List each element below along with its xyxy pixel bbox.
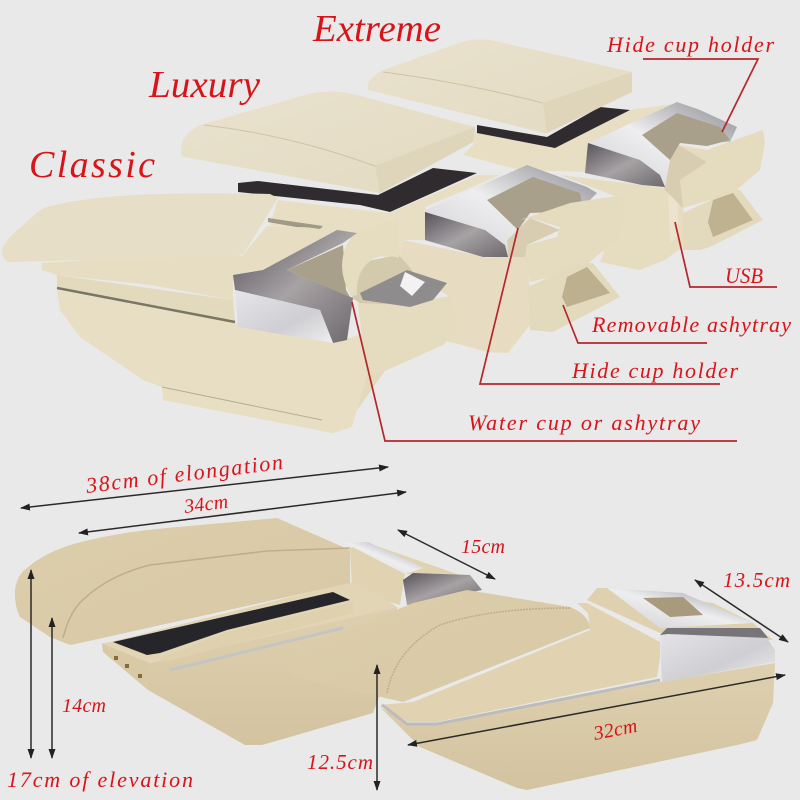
chrome rod [382, 680, 660, 724]
Classic chrome face [235, 290, 333, 343]
Classic foot [162, 340, 387, 433]
dimension label: 14cm: 14cm [62, 695, 106, 717]
Classic cup well [287, 245, 350, 297]
Classic body [57, 290, 368, 433]
dimension arrow: 38cm [21, 467, 388, 508]
label: Extreme: Extreme [312, 8, 441, 50]
dark mechanism [113, 592, 350, 655]
Luxury ashtray opening [562, 267, 610, 307]
label: USB: USB [725, 263, 763, 288]
chrome strip [345, 542, 424, 574]
dimension label: 32cm: 32cm [591, 715, 639, 745]
Classic side strip [57, 275, 235, 322]
chrome block [403, 573, 482, 605]
Extreme USB panel [668, 185, 678, 243]
dimension label: 38cm of elongation: 38cm of elongation [84, 449, 284, 498]
deck [103, 582, 397, 663]
armrest: Extreme [368, 40, 765, 270]
dimension arrow: 17cm [30, 570, 32, 758]
console [350, 542, 460, 605]
chrome ring [607, 588, 753, 628]
Classic lid [2, 193, 278, 262]
Classic chrome frame [233, 230, 357, 343]
dimension arrow: 34cm [79, 492, 406, 533]
label: removable ashtray: Removable ashytray [591, 312, 791, 337]
label: Luxury: Luxury [148, 64, 260, 106]
Extreme cup backing [650, 145, 707, 208]
leader: hide cup holder, Luxury [480, 228, 720, 384]
Extreme chrome front [585, 143, 665, 187]
leader: water cup or ashtray [352, 302, 737, 441]
dimension label: 34cm: 34cm [182, 491, 229, 518]
Extreme cup holder [678, 130, 765, 208]
deck [380, 603, 660, 722]
dimension arrow: 13.5cm [695, 580, 788, 642]
leader: USB [675, 222, 777, 287]
Extreme lid front face [543, 72, 632, 133]
Classic flip door [342, 220, 399, 296]
label: hide cup holder, top: Hide cup holder [606, 32, 774, 57]
Luxury cup well [487, 177, 583, 230]
Luxury cup backing [507, 218, 560, 257]
Luxury body [400, 240, 530, 353]
Luxury mechanism [238, 168, 477, 212]
body [380, 663, 775, 790]
Extreme deck [463, 103, 680, 172]
lid [288, 590, 590, 702]
Extreme body [560, 175, 685, 270]
Classic hole backing [352, 255, 412, 305]
Classic cup holder [357, 296, 458, 375]
armrest: open right unit [288, 588, 775, 790]
Extreme ashtray opening [708, 193, 753, 237]
dimension arrow: 12.5cm [376, 665, 378, 790]
dimension label: 17cm of elevation: 17cm of elevation [7, 767, 193, 792]
lower body [102, 607, 400, 745]
Classic chrome interior [360, 270, 447, 307]
console [587, 588, 773, 640]
Extreme mechanism [477, 107, 630, 148]
dimension label: 15cm: 15cm [461, 536, 505, 558]
Luxury deck [270, 175, 500, 265]
Luxury chrome frame [425, 165, 597, 257]
Extreme lid [368, 40, 632, 133]
dimension arrow: 14cm [51, 618, 53, 758]
label: water cup or ashtray: Water cup or ashytray [468, 410, 700, 435]
Luxury cup holder [520, 195, 625, 282]
Extreme cup well [642, 113, 730, 160]
dimension arrow: 15cm [398, 530, 495, 579]
label: Classic: Classic [29, 144, 155, 186]
Luxury lid [181, 92, 475, 193]
leader: hide cup holder, Extreme [643, 59, 758, 132]
armrest: Luxury [181, 92, 625, 353]
Extreme chrome frame [585, 102, 737, 187]
armrest: closed left unit [15, 518, 482, 745]
chrome block [660, 628, 775, 682]
cup opening [643, 597, 703, 617]
chrome rod [170, 628, 343, 670]
Extreme ashtray [683, 190, 763, 250]
leader: removable ashtray [563, 305, 707, 343]
Classic deck [42, 226, 355, 300]
lid [15, 518, 350, 645]
tray [162, 602, 353, 662]
label: hide cup holder, middle: Hide cup holder [571, 358, 738, 383]
Luxury ashtray [528, 263, 620, 332]
armrest: Classic [2, 193, 458, 433]
end panel with sockets [102, 643, 148, 690]
dimension label: 12.5cm: 12.5cm [307, 750, 373, 774]
Luxury chrome front [425, 212, 508, 257]
Luxury lid front face [375, 127, 475, 193]
dimension label: 13.5cm: 13.5cm [723, 568, 790, 592]
dimension arrow: 32cm [408, 675, 785, 745]
